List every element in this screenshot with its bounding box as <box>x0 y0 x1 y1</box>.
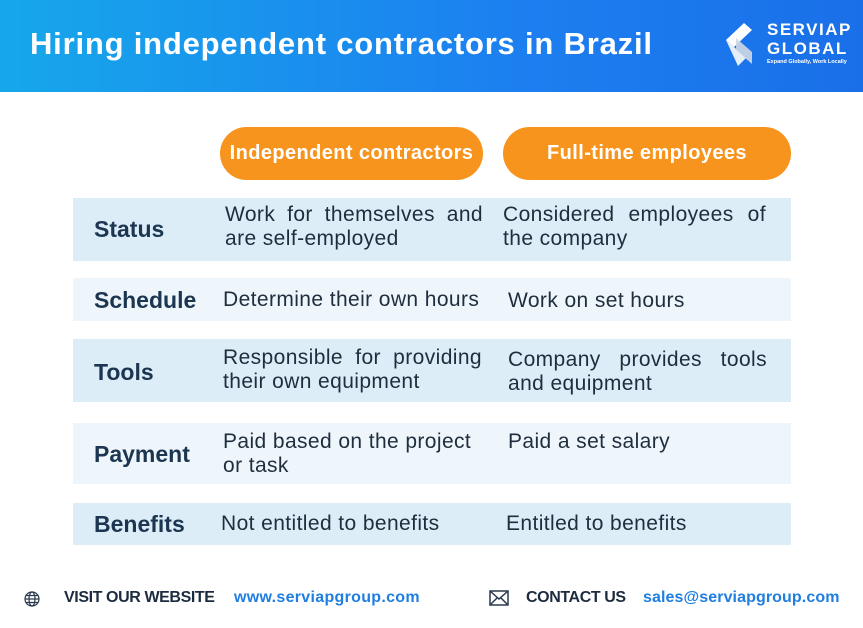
row: tools: Tools <box>94 359 154 385</box>
footer: contact: sales@serviapgroup.com <box>643 589 840 606</box>
row: status: Considered employees of <box>503 203 766 226</box>
logo text: SERVIAP <box>767 20 852 39</box>
logo text: GLOBAL <box>767 39 848 58</box>
logo <box>726 20 852 66</box>
row: tools: Responsible for providing <box>223 346 482 369</box>
row: schedule: Determine their own hours <box>223 288 479 311</box>
pill: independent contractors: Independent contractors <box>230 142 473 164</box>
row: payment: Payment <box>94 441 190 467</box>
row: benefits: Entitled to benefits <box>506 512 687 535</box>
row: status: the company <box>503 227 628 250</box>
footer: contact: CONTACT US <box>526 589 626 606</box>
row: status: are self-employed <box>225 227 399 250</box>
row: tools <box>73 339 791 402</box>
row: status: Status <box>94 216 164 242</box>
row: schedule: Schedule <box>94 287 196 313</box>
row: status: Work for themselves and <box>225 203 483 226</box>
pill: full-time employees <box>503 127 791 180</box>
row: schedule <box>73 278 791 321</box>
title: Hiring independent contractors in Brazil <box>30 26 653 61</box>
footer: website: www.serviapgroup.com <box>234 589 420 606</box>
pill: independent contractors <box>220 127 483 180</box>
row: benefits <box>73 503 791 545</box>
icon: logo mark <box>726 23 752 66</box>
footer: website <box>24 589 420 607</box>
row: benefits: Benefits <box>94 511 185 537</box>
row: status <box>73 198 791 261</box>
row: payment: Paid a set salary <box>508 430 670 453</box>
footer: website: VISIT OUR WEBSITE <box>64 589 215 606</box>
row: tools: their own equipment <box>223 370 420 393</box>
row: schedule: Work on set hours <box>508 289 685 312</box>
row: payment: Paid based on the project <box>223 430 471 453</box>
row: benefits: Not entitled to benefits <box>221 512 440 535</box>
footer: contact <box>489 589 840 606</box>
row: payment: or task <box>223 454 289 477</box>
logo: Expand Globally, Work Locally <box>767 59 847 65</box>
icon: envelope <box>489 590 509 606</box>
pill: full-time employees: Full-time employees <box>547 142 747 164</box>
row: tools: Company provides tools <box>508 348 767 371</box>
logo text <box>767 20 852 58</box>
row: tools: and equipment <box>508 372 652 395</box>
row: payment <box>73 423 791 484</box>
header banner <box>0 0 863 92</box>
icon: globe <box>24 591 40 607</box>
